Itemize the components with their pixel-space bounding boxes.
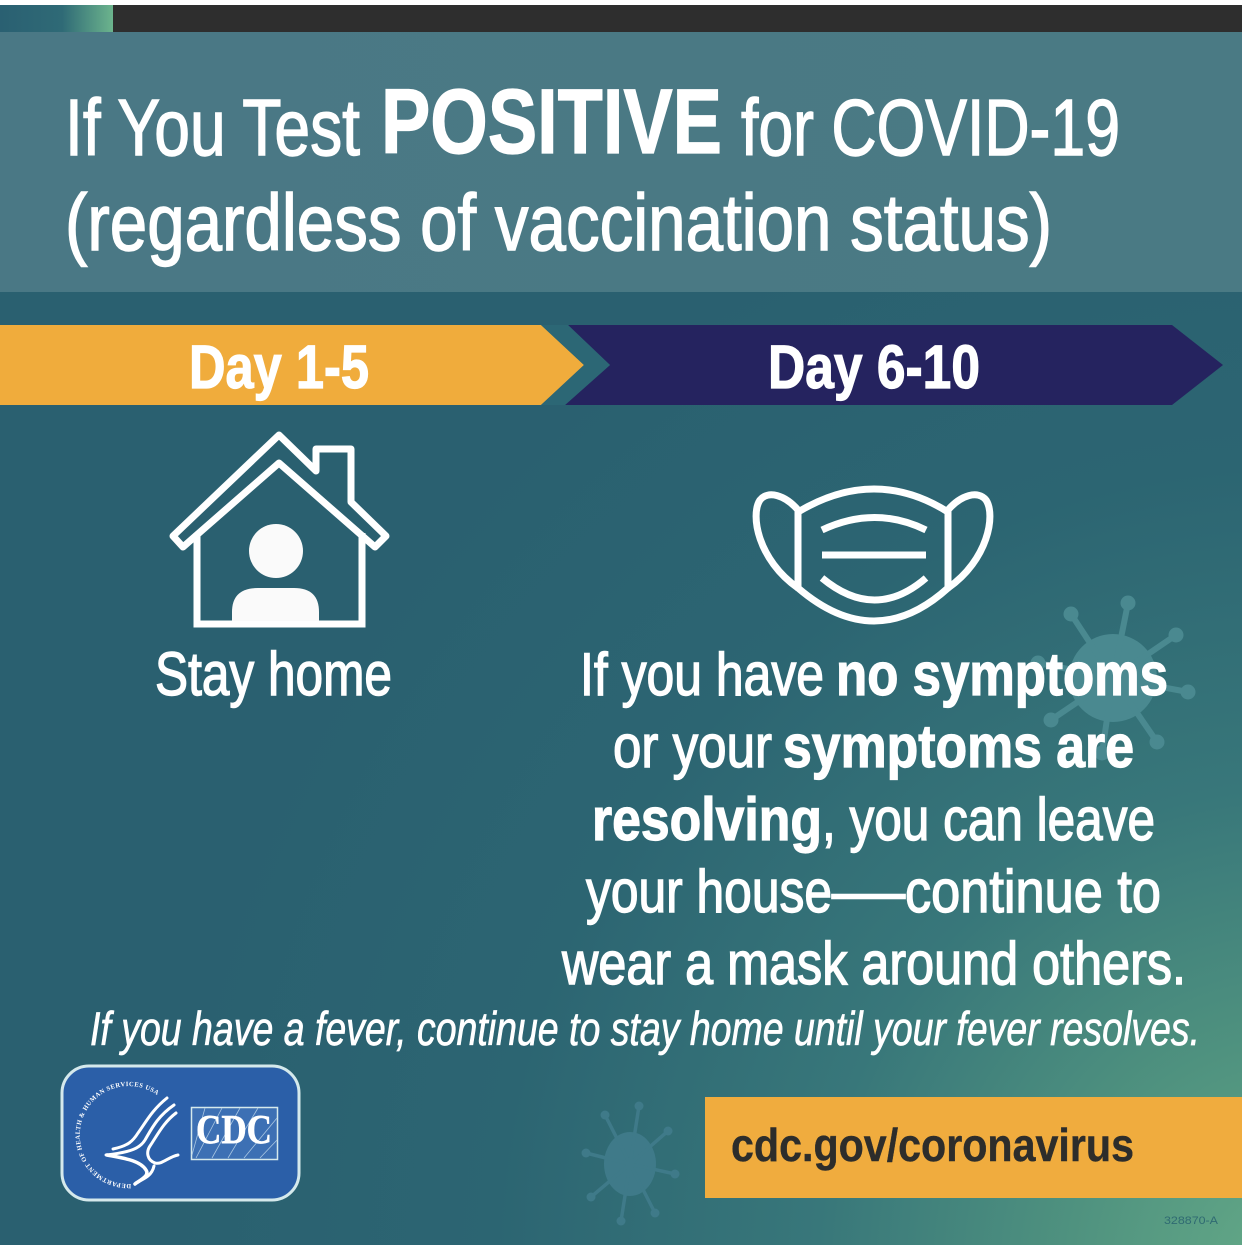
title: for COVID-19	[741, 83, 1120, 172]
icon: face mask	[756, 489, 990, 621]
text: day 6-10 guidance: symptoms are	[783, 713, 1134, 780]
url banner: cdc.gov/coronavirus	[731, 1119, 1134, 1171]
url banner	[705, 1097, 1242, 1198]
arrow: day 1-5	[0, 325, 584, 405]
text: day 6-10 guidance: your house	[586, 858, 832, 925]
text: day 6-10 guidance: If you have	[580, 641, 824, 708]
text: day 6-10 guidance: no symptoms	[836, 641, 1168, 708]
header band	[0, 32, 1242, 292]
HHS seal text: DEPARTMENT OF HEALTH & HUMAN SERVICES USA	[75, 1082, 158, 1188]
logo: HHS and CDC	[60, 1064, 300, 1202]
icon: house with person	[173, 435, 386, 624]
title: If You Test	[65, 83, 360, 172]
arrow: day 1-5: Day 1-5	[189, 333, 369, 401]
HHS eagle	[106, 1098, 178, 1184]
title: (regardless of vaccination status)	[65, 178, 1052, 267]
text: day 6-10 guidance: resolving	[592, 786, 822, 853]
text: stay home: Stay home	[155, 640, 392, 708]
virus: small	[582, 1102, 680, 1226]
text: day 6-10 guidance: continue to	[905, 858, 1161, 925]
text: day 6-10 guidance: or your	[613, 713, 772, 780]
virus: large	[1030, 596, 1196, 760]
text: day 6-10 guidance: —	[832, 858, 905, 925]
top strip	[0, 5, 1242, 32]
arrow: day 6-10	[541, 325, 1223, 405]
title	[65, 71, 1120, 267]
title: POSITIVE	[381, 71, 722, 173]
text: day 6-10 guidance: , you can leave	[822, 786, 1155, 853]
arrow: day 6-10: Day 6-10	[768, 333, 980, 401]
text: day 6-10 guidance	[561, 641, 1186, 997]
document code: 328870-A	[1164, 1215, 1219, 1227]
CDC box: CDC	[196, 1106, 272, 1152]
